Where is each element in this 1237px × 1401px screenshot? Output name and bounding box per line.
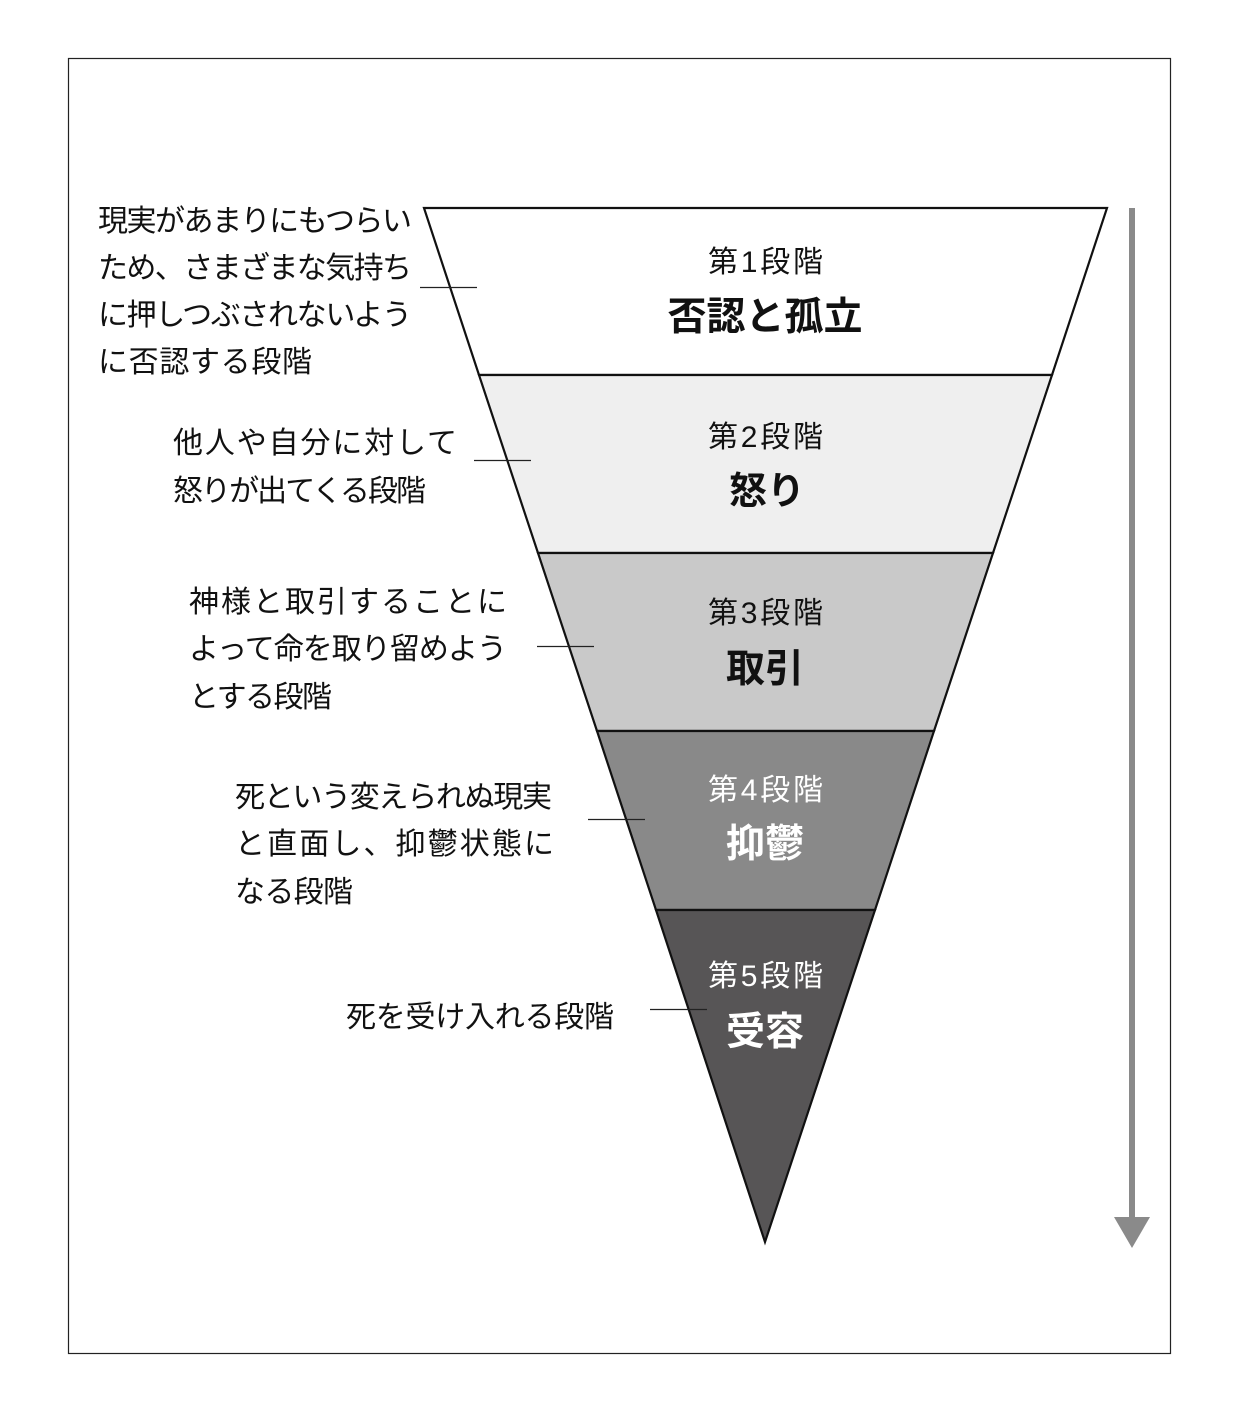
description: stage 1: に押しつぶされないよう: [98, 299, 412, 332]
description: stage 1: に否認する段階: [98, 346, 312, 379]
leader line: stage 2: [474, 460, 531, 462]
stage 3 label: 第3段階: [708, 597, 823, 630]
description: stage 2: [173, 427, 457, 508]
stage 1 label: 第1段階: [708, 246, 823, 279]
stage 4 label: [708, 774, 823, 866]
stage 4 label: 抑鬱: [726, 823, 804, 866]
stage 2 label: 第2段階: [708, 421, 823, 454]
description: stage 3: とする段階: [189, 681, 332, 714]
stage 2 label: [708, 421, 823, 513]
stage 5 band: [656, 910, 875, 1242]
stage 2 label: 怒り: [729, 471, 805, 513]
description: stage 4: [235, 781, 554, 909]
description: stage 5: 死を受け入れる段階: [346, 1001, 614, 1034]
stage 3 label: [708, 597, 823, 691]
stage 2 band: [479, 375, 1052, 553]
stage 5 label: 受容: [726, 1011, 804, 1054]
description: stage 4: と直面し、抑鬱状態に: [235, 828, 554, 861]
stage 3 band: [538, 553, 993, 731]
description: stage 1: 現実があまりにもつらい: [98, 205, 412, 238]
description: stage 3: よって命を取り留めよう: [189, 633, 507, 666]
description: stage 3: 神様と取引することに: [189, 586, 507, 619]
stage 1 label: 否認と孤立: [667, 296, 863, 339]
description: stage 3: [189, 586, 507, 714]
description: stage 1: [98, 205, 412, 379]
description: stage 2: 怒りが出てくる段階: [173, 475, 426, 508]
leader line: stage 3: [537, 646, 594, 648]
stage 4 label: 第4段階: [708, 774, 823, 807]
description: stage 1: ため、さまざまな気持ち: [98, 252, 412, 285]
progress arrow: [1114, 208, 1150, 1248]
leader line: stage 4: [588, 818, 645, 820]
stage 3 label: 取引: [726, 648, 804, 691]
leader line: stage 1: [420, 286, 477, 288]
stage 4 band: [597, 731, 934, 910]
stage 5 label: [708, 960, 823, 1054]
stage 5 label: 第5段階: [708, 960, 823, 993]
stage 1 label: [667, 246, 863, 339]
description: stage 4: 死という変えられぬ現実: [235, 781, 552, 814]
leader line: stage 5: [650, 1008, 707, 1010]
description: stage 4: なる段階: [235, 876, 353, 909]
description: stage 2: 他人や自分に対して: [173, 427, 457, 460]
inverted triangle diagram: [424, 208, 1107, 1242]
stage 1 band: [424, 208, 1107, 375]
